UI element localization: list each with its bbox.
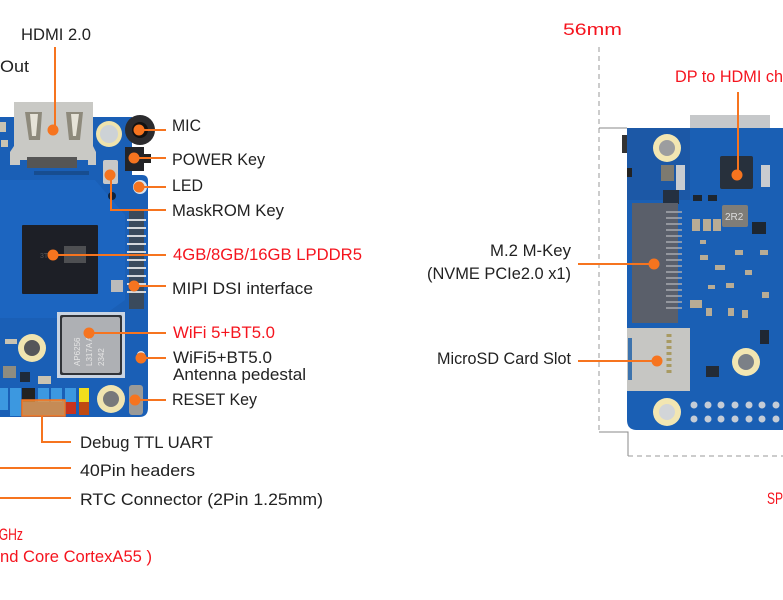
icon: pin headers [0,388,89,416]
icon: WiFi module: 2342 [97,348,106,366]
icon: mounting hole top [96,121,122,147]
icon: small components [690,195,769,344]
label: LED: LED [172,176,203,195]
label: WiFi: WiFi 5+BT5.0 [173,323,275,342]
arrow: MaskROM leader [104,170,166,210]
dimension lines [599,47,783,456]
icon: M.2 M-Key slot [632,203,682,323]
label: MicroSD: MicroSD Card Slot [437,349,571,368]
label: antenna pedestal: WiFi5+BT5.0 [173,348,272,367]
arrow: 40pin leader [0,467,71,469]
board body [627,128,783,430]
label: memory: 4GB/8GB/16GB LPDDR5 [173,245,362,264]
label: MaskROM Key: MaskROM Key [172,201,284,220]
HDMI connector on back [690,115,770,129]
icon: side switch parts [622,135,770,204]
arrow: LED leader [134,182,166,192]
arrow: WiFi leader [84,328,166,338]
label: CPU cores: nd Core CortexA55 ) [0,547,152,566]
label: 56mm dimension: 56mm [563,20,622,39]
label: antenna pedestal [173,348,306,384]
arrow: HDMI leader [48,47,58,136]
arrow: MIC leader [134,124,166,136]
panel: left board photo [0,102,155,417]
icon: WiFi module [57,312,125,378]
label: RTC connector: RTC Connector (2Pin 1.25mm) [80,490,323,509]
icon: WiFi module: AP6256 [73,337,82,366]
label: antenna pedestal: Antenna pedestal [173,365,306,384]
icon: mounting hole center [732,348,760,376]
icon: MIPI DSI connector [111,211,146,309]
arrow: debug UART leader [42,416,71,442]
icon: WiFi module: L317A AL [85,331,94,366]
label: HDMI: HDMI 2.0 [21,25,91,44]
icon: maskrom key [103,160,118,200]
arrow: antenna leader [136,352,166,364]
label: RESET Key: RESET Key [172,390,257,409]
label: 40Pin headers: 40Pin headers [80,461,195,480]
board body [0,117,148,417]
icon: mounting hole right [97,385,125,413]
icon: 2R2 inductor: 2R2 [725,212,744,223]
arrow: MIPI leader [128,280,166,292]
icon: reset key [129,385,143,415]
panel: right board photo [622,115,783,430]
label: POWER Key: POWER Key [172,150,265,169]
arrow: power key leader [128,152,166,164]
icon: microphone [125,115,155,145]
arrow: DP to HDMI leader [732,92,742,180]
label: Debug UART: Debug TTL UART [80,433,213,452]
arrow: MicroSD leader [578,356,662,366]
arrow: M.2 leader [578,258,660,270]
icon: header holes [690,402,780,422]
icon: small chip [706,366,719,377]
icon: HDMI connector [10,102,96,175]
label: video out: Out [0,57,29,76]
icon: LPDDR5 memory chip [22,225,98,294]
label: MIPI DSI: MIPI DSI interface [172,279,313,298]
icon: 2R2 inductor [722,205,748,227]
label: M.2: M.2 M-Key [490,241,571,260]
arrow: RTC leader [0,497,71,499]
icon: small components left [0,122,51,384]
icon: LED [133,180,147,194]
label: M.2: (NVME PCIe2.0 x1) [427,264,571,283]
icon: MicroSD card slot [627,328,690,391]
icon: mounting hole bottom [653,398,681,426]
arrow: reset leader [130,394,166,406]
icon: power key [125,147,151,171]
icon: mounting hole top [653,134,681,162]
icon: LPDDR5 memory chip: 3T [40,253,49,260]
icon: mounting hole lower [18,334,46,362]
icon: DP to HDMI chip [720,156,753,189]
label: MIC: MIC [172,116,201,135]
icon: antenna pedestal [137,351,145,359]
arrow: memory leader [48,250,166,260]
label: M.2 [427,241,571,283]
